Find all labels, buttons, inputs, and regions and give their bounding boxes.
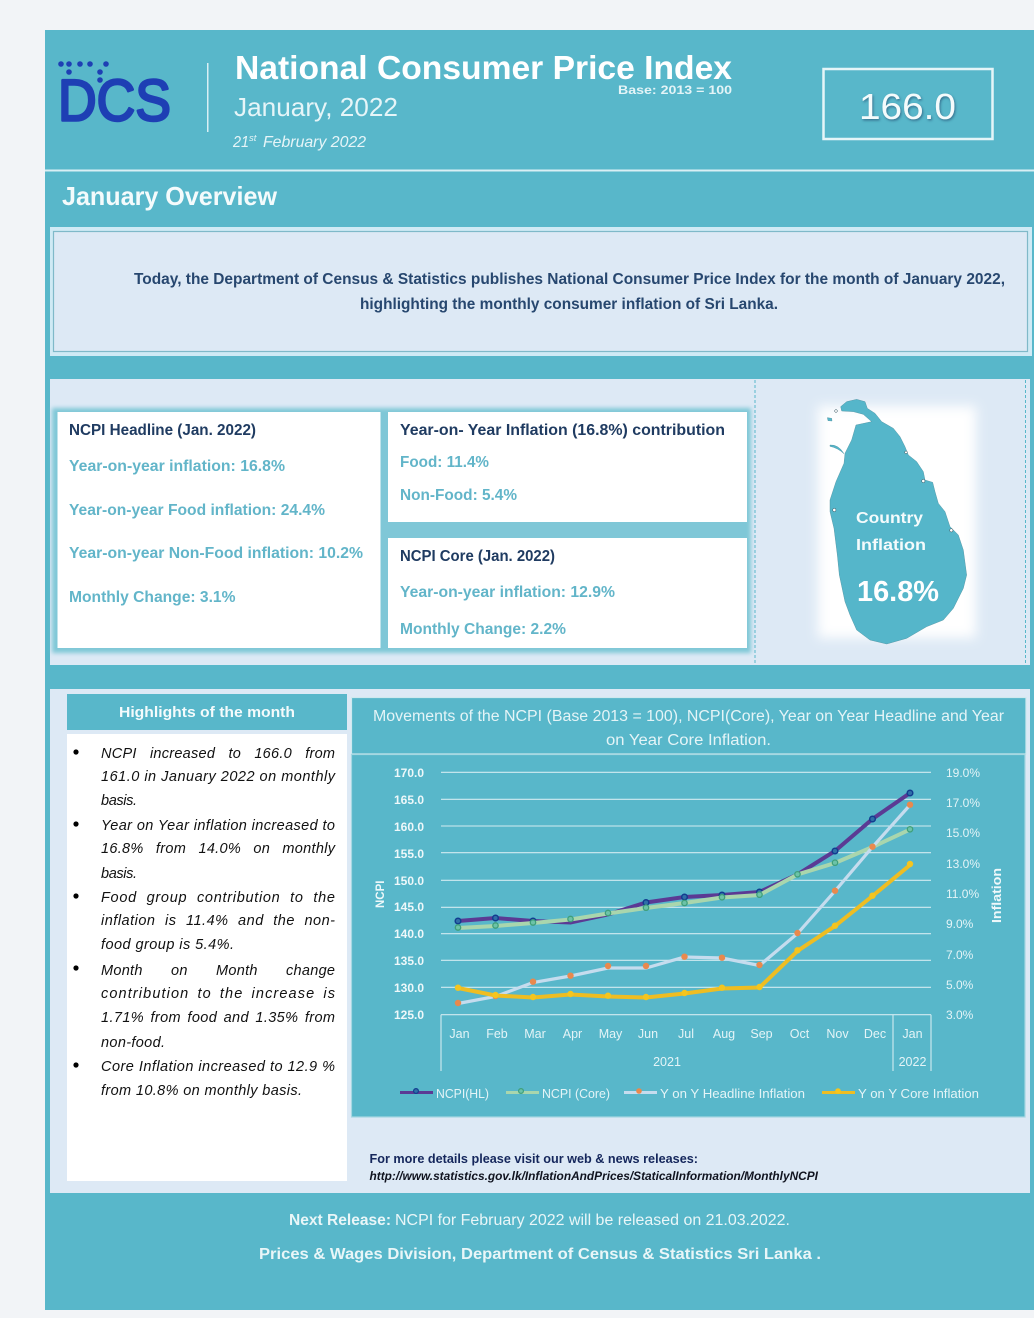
logo: DCS: DCS (58, 68, 171, 134)
month labels: Aug (713, 1027, 735, 1041)
left axis labels: 165.0 (394, 793, 424, 807)
release date: st (249, 133, 257, 144)
month labels: Dec (864, 1027, 886, 1041)
bullet list: 161.0 in January 2022 on monthly (101, 769, 336, 785)
left axis labels: 135.0 (394, 954, 424, 968)
month labels: Feb (486, 1027, 508, 1041)
bullet list: food group is 5.4%. (101, 937, 234, 953)
left axis labels: 170.0 (394, 766, 424, 780)
line: year on year headline inflation (455, 802, 913, 1006)
left axis labels: 140.0 (394, 927, 424, 941)
more details note: http://www.statistics.gov.lk/InflationAndPrices/StaticalInformation/MonthlyNCPI (370, 1171, 819, 1183)
bullet list: Year on Year inflation increased to (101, 818, 335, 834)
footer: Next Release: (289, 1212, 391, 1229)
footer: Prices & Wages Division, Department of Census & Statistics Sri Lanka . (259, 1246, 821, 1263)
release date: February 2022 (263, 134, 366, 151)
right axis labels: 7.0% (946, 948, 974, 962)
panel: overview statement (50, 227, 1032, 356)
right axis labels: 9.0% (946, 917, 974, 931)
more details note (370, 1152, 819, 1183)
bullet list: Month on Month change (101, 963, 335, 979)
month labels: Jul (678, 1027, 694, 1041)
chart: NCPI and inflation movements (352, 698, 1026, 1117)
chart legend (400, 1087, 979, 1101)
right axis labels: 3.0% (946, 1008, 974, 1022)
bullet list: basis. (101, 866, 137, 882)
card: inflation contribution (388, 412, 747, 522)
header (58, 49, 992, 151)
bullet list: from 10.8% on monthly basis. (101, 1083, 302, 1099)
bullet list: 1.71% from food and 1.35% from (101, 1010, 335, 1026)
panel: key figures (50, 379, 1030, 665)
month labels: May (599, 1027, 623, 1041)
card: NCPI headline (58, 412, 380, 648)
line: NCPI headline (455, 790, 913, 924)
bullet list: inflation is 11.4% and the non- (101, 913, 335, 929)
bullet list: contribution to the increase is (101, 986, 335, 1002)
left axis labels: 130.0 (394, 981, 424, 995)
card: NCPI headline: Year-on-year Food inflation: 24.4% (69, 502, 325, 519)
card: NCPI core: Year-on-year inflation: 12.9% (400, 584, 615, 601)
bullet list: non-food. (101, 1035, 165, 1051)
bullet list: Core Inflation increased to 12.9 % (101, 1059, 335, 1075)
month labels: 2021 (653, 1055, 681, 1069)
line: year on year core inflation (455, 861, 913, 1000)
panel: overview statement: Today, the Department of Census & Statistics publishes National Consumer Price Index for the month of January 2022, (134, 271, 1005, 288)
chart legend: NCPI (Core) (542, 1087, 610, 1101)
right axis labels: 17.0% (946, 796, 980, 810)
card: NCPI headline: Year-on-year inflation: 16.8% (69, 458, 285, 475)
bullet list: Food group contribution to the (101, 890, 335, 906)
left axis labels: NCPI (375, 881, 387, 908)
month labels: Nov (826, 1027, 849, 1041)
card: NCPI core: NCPI Core (Jan. 2022) (400, 548, 555, 565)
chart legend: Y on Y Core Inflation (858, 1087, 979, 1101)
month labels: Apr (563, 1027, 582, 1041)
right axis labels: 13.0% (946, 857, 980, 871)
index value box: 166.0 (859, 86, 956, 127)
month labels (449, 1027, 926, 1069)
heading: highlights: Highlights of the month (119, 704, 295, 721)
month labels: Jun (638, 1027, 658, 1041)
chart title: on Year Core Inflation. (606, 732, 771, 749)
base note: Base: 2013 = 100 (618, 83, 732, 97)
right axis labels: 19.0% (946, 766, 980, 780)
map: Sri Lanka country inflation (818, 399, 976, 644)
panel: lower section (50, 689, 1030, 1193)
title: National Consumer Price Index (235, 49, 733, 86)
map: Sri Lanka country inflation: 16.8% (857, 576, 939, 608)
left axis labels (375, 766, 424, 1022)
month labels: Mar (524, 1027, 546, 1041)
chart legend: NCPI(HL) (436, 1087, 489, 1101)
month labels: Jan (902, 1027, 923, 1041)
map: Sri Lanka country inflation: Country (856, 510, 923, 527)
month labels: 2022 (899, 1055, 926, 1069)
left axis labels: 160.0 (394, 820, 424, 834)
right axis labels: 11.0% (946, 887, 979, 901)
month: January, 2022 (234, 92, 398, 122)
right axis labels: Inflation (989, 868, 1004, 923)
month labels: Sep (750, 1027, 773, 1041)
panel: overview statement: highlighting the monthly consumer inflation of Sri Lanka. (360, 296, 778, 313)
right axis labels: 15.0% (946, 826, 980, 840)
heading: January Overview: January Overview (62, 181, 278, 211)
heading: highlights (67, 694, 347, 730)
card: inflation contribution: Non-Food: 5.4% (400, 487, 517, 504)
month labels: Jan (449, 1027, 470, 1041)
panel: highlights of the month (67, 694, 347, 1181)
more details note: For more details please visit our web & news releases: (370, 1152, 698, 1166)
right axis labels (946, 766, 1004, 1022)
card: inflation contribution: Year-on- Year Inflation (16.8%) contribution (400, 422, 725, 439)
card: inflation contribution: Food: 11.4% (400, 454, 489, 471)
month labels: Oct (790, 1027, 810, 1041)
left axis labels: 125.0 (394, 1008, 424, 1022)
bullet list: basis. (101, 793, 137, 809)
left axis labels: 150.0 (394, 874, 424, 888)
card: NCPI headline: Year-on-year Non-Food inflation: 10.2% (69, 545, 363, 562)
bullet list: NCPI increased to 166.0 from (101, 746, 335, 762)
card: NCPI core: Monthly Change: 2.2% (400, 621, 566, 638)
bullet list (73, 746, 336, 1099)
footer (259, 1212, 821, 1263)
index value box (824, 69, 992, 139)
left axis labels: 145.0 (394, 900, 424, 914)
chart legend: Y on Y Headline Inflation (660, 1087, 805, 1101)
map: Sri Lanka country inflation: Inflation (856, 537, 926, 554)
release date: 21 (232, 134, 249, 151)
card: NCPI headline: NCPI Headline (Jan. 2022) (69, 422, 256, 439)
footer: NCPI for February 2022 will be released on 21.03.2022. (395, 1212, 790, 1229)
left axis labels: 155.0 (394, 847, 424, 861)
line: NCPI core (455, 827, 913, 930)
card: NCPI headline: Monthly Change: 3.1% (69, 589, 236, 606)
right axis labels: 5.0% (946, 978, 974, 992)
bullet list: 16.8% from 14.0% on monthly (101, 841, 336, 857)
chart title (373, 708, 1004, 749)
chart title: Movements of the NCPI (Base 2013 = 100), NCPI(Core), Year on Year Headline and Year (373, 708, 1004, 725)
card: NCPI core (388, 538, 747, 648)
